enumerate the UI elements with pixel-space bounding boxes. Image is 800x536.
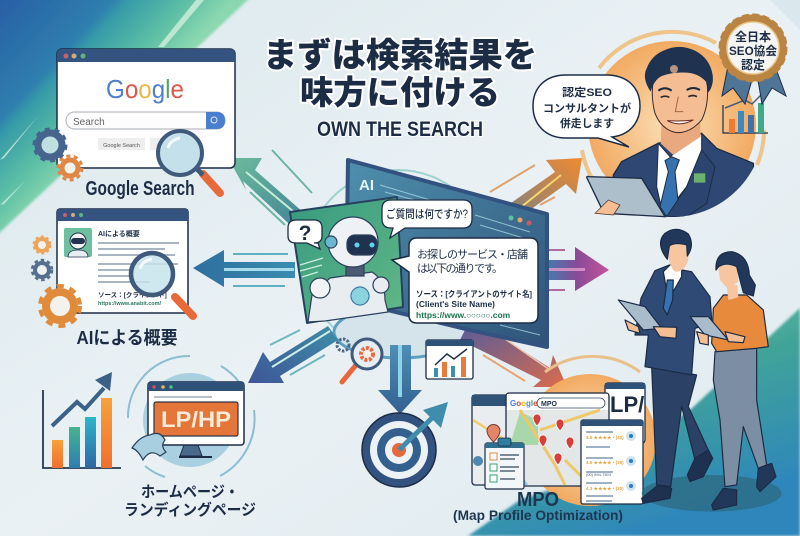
label: home page / landing page xyxy=(124,483,256,519)
AI screen xyxy=(346,160,547,347)
bubble: AI answer: ソース：[クライアントのサイト名] xyxy=(416,289,532,299)
label: MPO: MPO xyxy=(517,489,559,511)
icon: growth chart window xyxy=(426,340,473,379)
certification badge: 認定 xyxy=(741,58,765,72)
listing window xyxy=(581,420,643,504)
label: MPO xyxy=(453,489,623,523)
checklist clipboard xyxy=(485,438,524,489)
speech bubble: consultant: 併走します xyxy=(560,116,614,130)
map window main: Google xyxy=(510,399,538,408)
man xyxy=(618,229,713,503)
Google logo: Google xyxy=(106,74,184,104)
woman xyxy=(690,252,776,510)
title: OWN THE SEARCH xyxy=(317,118,483,141)
label: AI overview: AIによる概要 xyxy=(76,328,178,348)
icon: magnifier AI overview xyxy=(131,253,193,316)
bubble: question text: ご質問は何ですか? xyxy=(386,207,468,221)
label: Google Search: Google Search xyxy=(86,178,194,200)
panel: AI overview window: https://www.anabit.com/ xyxy=(98,301,162,307)
icon: magnifier Google xyxy=(158,131,220,193)
icon: target xyxy=(362,402,448,487)
consultant tablet xyxy=(587,176,665,217)
certification badge: SEO協会 xyxy=(729,43,777,58)
certification badge: 全日本 xyxy=(735,29,771,44)
arrow: to MPO xyxy=(460,330,567,387)
listing window: 4.3 ★★★★ • (20) xyxy=(586,486,624,491)
label: home page / landing page: ホームページ・ xyxy=(141,483,239,501)
icon: LP/HP monitor: LP/HP xyxy=(161,407,231,432)
consultant shirt and tie xyxy=(657,133,702,217)
map window main: MPO xyxy=(541,401,558,408)
certification badge xyxy=(720,15,786,104)
panel: AI overview window: ソース：[クライアント] xyxy=(98,290,167,299)
LP window (MPO cluster): LP/ xyxy=(610,392,644,417)
people walking xyxy=(618,229,782,512)
bubble: AI answer: (Client's Site Name) xyxy=(416,299,495,309)
label: home page / landing page: ランディングページ xyxy=(124,500,256,519)
arrow: to home page xyxy=(248,326,338,383)
robot panel xyxy=(290,197,403,323)
arrow: to people xyxy=(545,247,609,291)
speech bubble: consultant xyxy=(533,75,640,147)
map window main xyxy=(505,393,609,486)
question bubble: ? xyxy=(299,222,311,245)
title xyxy=(263,28,537,141)
listing window: 4.5 ★★★★ • (30) xyxy=(586,460,624,465)
bubble: AI answer: お探しのサービス・店舗 xyxy=(417,247,528,261)
consultant portrait xyxy=(582,32,764,217)
panel: AI overview window xyxy=(57,209,188,313)
orange sun behind MPO xyxy=(524,356,656,506)
robot xyxy=(308,217,389,322)
icon: LP/HP monitor xyxy=(128,356,255,477)
panel: Google Search window: Google Search xyxy=(103,143,140,149)
listing window: (00) 894-7803 xyxy=(586,472,612,477)
bubble: question text xyxy=(382,200,472,238)
bar chart xyxy=(43,372,121,468)
speech bubble: consultant: 認定SEO xyxy=(562,86,612,99)
consultant hair xyxy=(645,47,713,93)
panel: Google Search window: Search xyxy=(73,117,105,128)
arrow: to consultant xyxy=(490,158,582,228)
speech bubble: consultant: コンサルタントが xyxy=(543,101,631,115)
listing window: 3.5 ★★★★ • (40) xyxy=(586,435,624,440)
title: まずは検索結果を xyxy=(263,28,537,77)
icon: magnifier with gear xyxy=(337,339,382,382)
arrow: to target xyxy=(378,345,422,414)
question bubble xyxy=(288,220,322,249)
chart beside badge xyxy=(723,90,768,133)
consultant neck and face xyxy=(660,122,701,155)
bubble: AI answer: https://www.○○○○○.com xyxy=(416,310,511,320)
icon: gears for AI overview xyxy=(32,236,80,326)
panel: AI overview window: AIによる概要 xyxy=(98,229,140,238)
central ring xyxy=(306,170,490,358)
LP window (MPO cluster) xyxy=(605,383,645,443)
AI screen: AI xyxy=(359,177,374,194)
bubble: AI answer: は以下の通りです。 xyxy=(417,262,503,275)
arrow: to Google Search xyxy=(228,150,312,234)
icon: gears for Google Search xyxy=(34,129,82,180)
title: 味方に付ける xyxy=(300,66,500,114)
panel: Google Search window xyxy=(57,49,235,168)
ground shadow xyxy=(642,475,782,512)
bubble: AI answer xyxy=(392,238,538,323)
map window left xyxy=(472,395,508,485)
label: MPO: (Map Profile Optimization) xyxy=(453,507,623,523)
consultant jacket xyxy=(613,133,757,217)
arrow: to AI overview xyxy=(193,250,295,287)
